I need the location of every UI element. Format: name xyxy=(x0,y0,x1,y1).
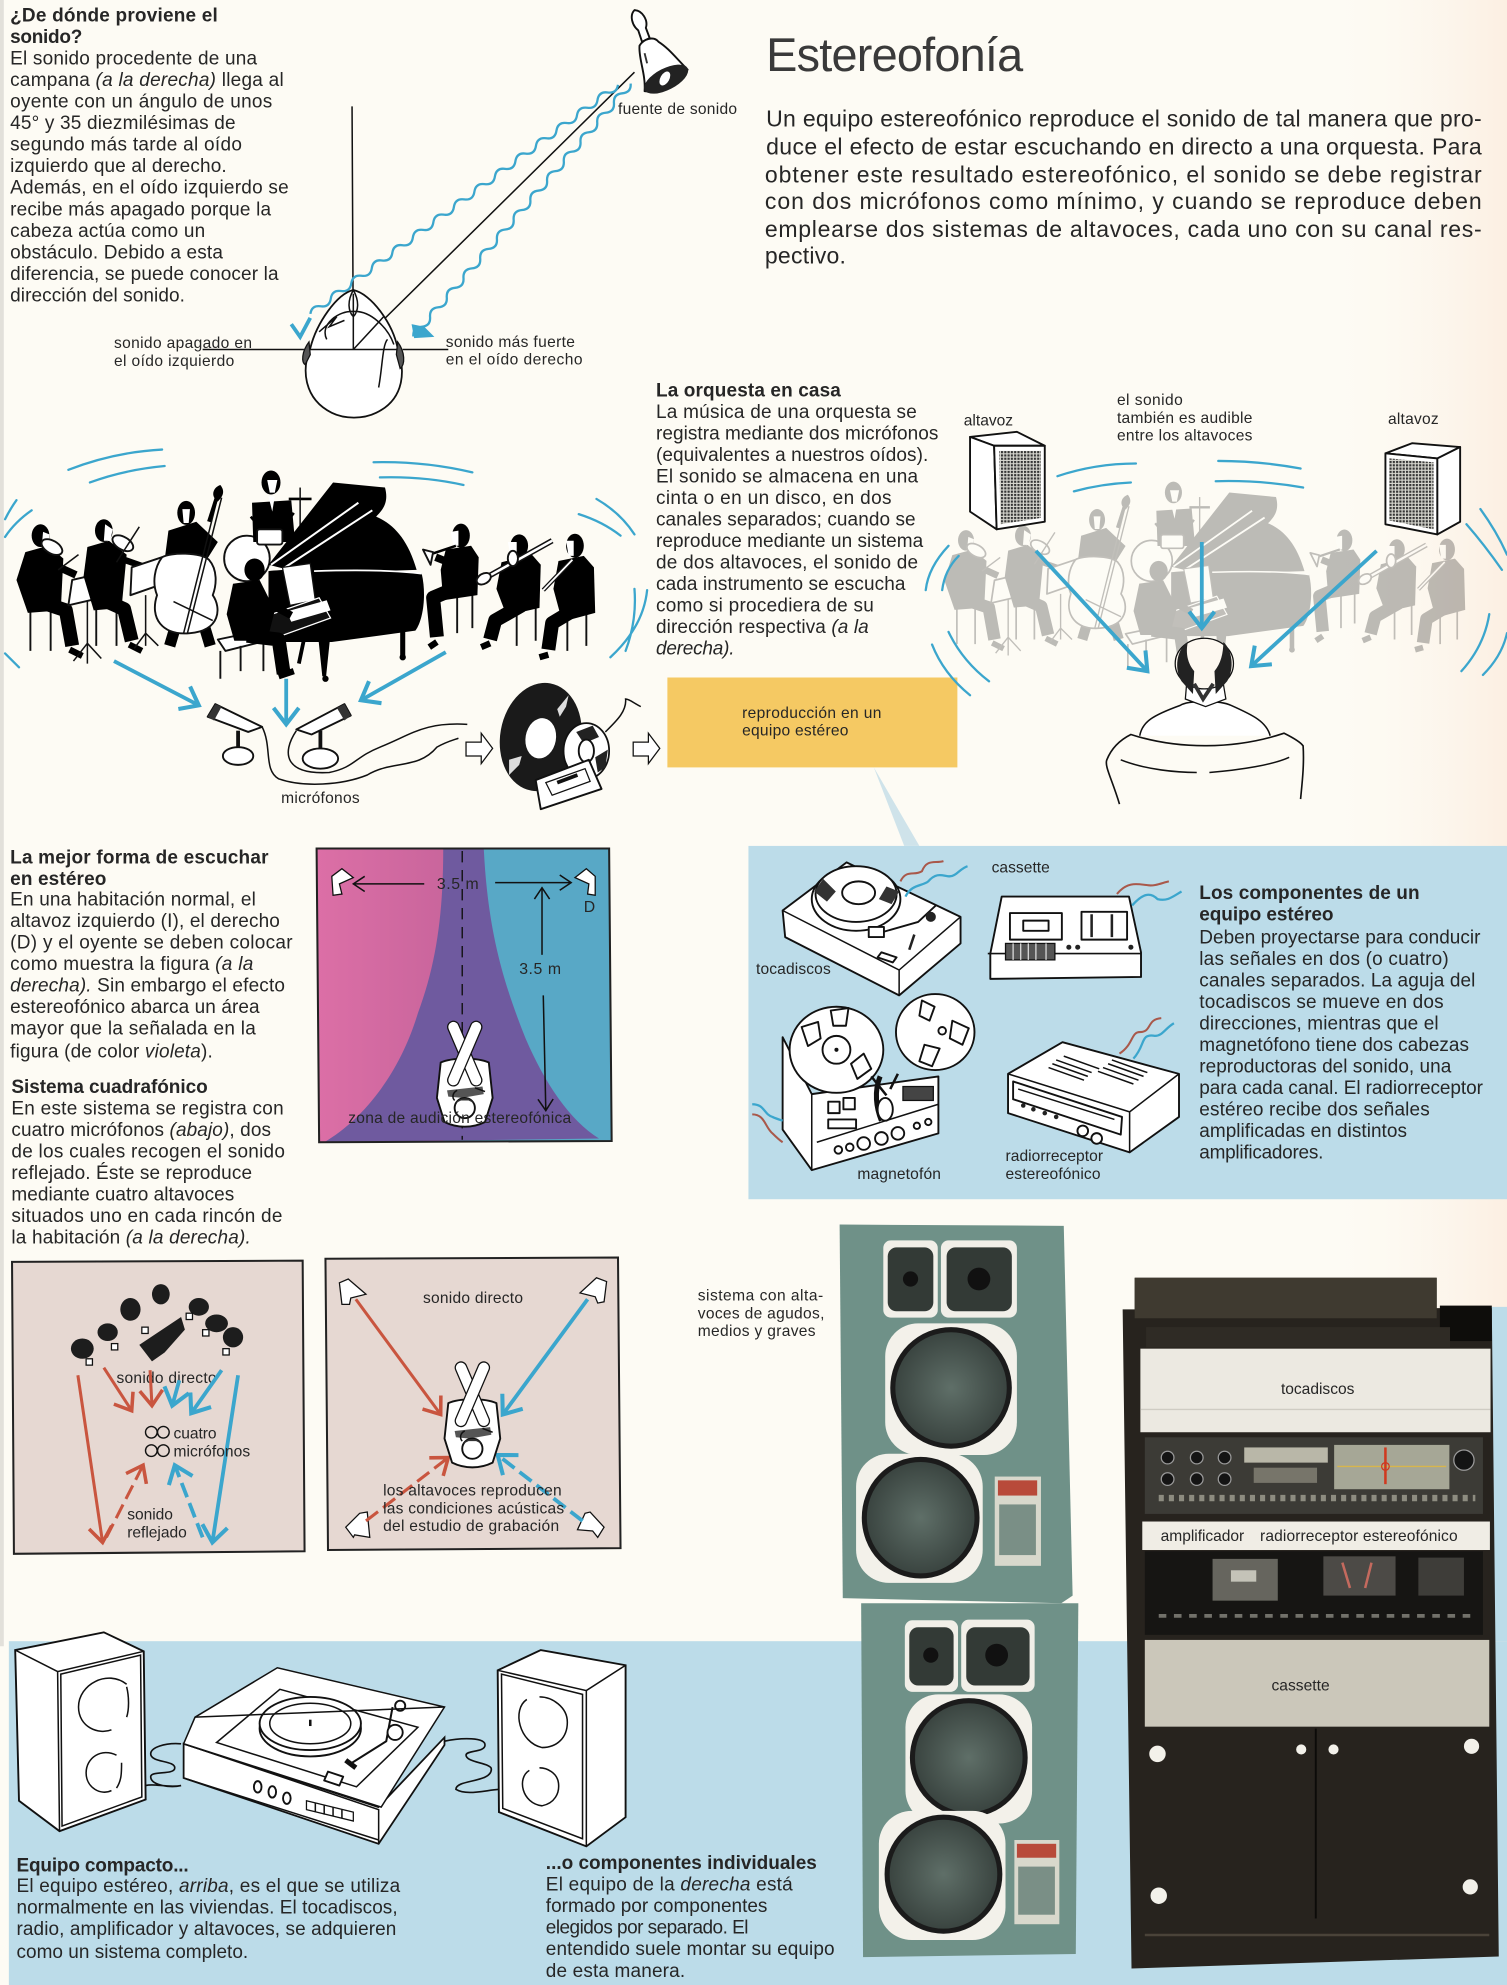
label: playback conditions: los altavoces reproducen xyxy=(383,1483,562,1500)
text: where sound comes from xyxy=(10,6,289,306)
red arrow 2 xyxy=(150,1370,152,1406)
label: zone: zona de audición estereofónica xyxy=(348,1110,571,1127)
label: speaker left: altavoz xyxy=(964,412,1013,429)
text: where sound comes from: campana (a la derecha) llega al xyxy=(10,70,284,91)
text: quadraphonic system: de los cuales recogen el sonido xyxy=(11,1141,285,1162)
text: best way to listen: como muestra la figura (a la xyxy=(10,954,253,975)
text: stereo components: Los componentes de un xyxy=(1199,883,1420,904)
arrow head: left ear xyxy=(291,318,310,337)
label: right ear: sonido más fuerte xyxy=(446,334,575,351)
text: orchestra at home: El sonido se almacena en una xyxy=(656,466,919,487)
left speaker xyxy=(332,869,353,895)
red arrow 1 xyxy=(104,1368,132,1411)
photo: lower speaker xyxy=(861,1603,1078,1957)
text: best way to listen: derecha). Sin embargo el efecto xyxy=(10,976,285,997)
text: where sound comes from: izquierdo que al derecho. xyxy=(10,156,227,177)
listener xyxy=(437,1027,493,1127)
arrow to right microphone xyxy=(361,652,446,700)
text: stereo components xyxy=(1199,883,1483,1164)
icon: right speaker xyxy=(1385,443,1460,534)
right microphone xyxy=(296,704,351,769)
turntable red wave xyxy=(900,861,943,881)
left cable xyxy=(146,1744,181,1786)
speaker top right xyxy=(580,1278,607,1303)
label: playback conditions: del estudio de grabación xyxy=(383,1518,559,1535)
icon: four microphones xyxy=(146,1426,169,1456)
arrow from right speaker xyxy=(1251,551,1377,666)
receiver xyxy=(1008,1042,1179,1152)
text: quadraphonic system: la habitación (a la derecha). xyxy=(11,1228,251,1249)
text: quadraphonic system: Sistema cuadrafónico xyxy=(11,1077,208,1098)
text: individual components: El equipo de la derecha está xyxy=(546,1875,793,1896)
cassette band: cassette xyxy=(1271,1678,1330,1695)
cabinet doors xyxy=(1145,1729,1489,1935)
intro paragraph: obtener este resultado estereofónico, el sonido se debe registrar xyxy=(765,161,1482,187)
text: compact system: normalmente en las viviendas. El tocadiscos, xyxy=(16,1897,398,1918)
label: left ear: sonido apagado en xyxy=(114,335,252,352)
text: stereo components: Deben proyectarse para conducir xyxy=(1199,927,1480,948)
cassette deck xyxy=(988,897,1141,979)
receiver signal waves xyxy=(1133,1023,1174,1059)
text: best way to listen: estereofónico abarca un área xyxy=(10,997,260,1018)
cassette deck unit xyxy=(1145,1551,1483,1635)
turntable xyxy=(783,862,961,995)
sound arcs xyxy=(926,461,1507,695)
text: best way to listen: mayor que la señalada en la xyxy=(10,1019,256,1040)
red direct arrow xyxy=(356,1299,441,1415)
text: orchestra at home: cada instrumento se escucha xyxy=(656,574,906,595)
text: individual components: de esta manera. xyxy=(546,1961,685,1982)
title: Estereofonía xyxy=(766,29,1024,81)
text: stereo components: reproductoras del sonido, una xyxy=(1199,1057,1452,1078)
label: receiver xyxy=(1006,1148,1103,1183)
blue arrow 1 xyxy=(172,1380,179,1406)
text: where sound comes from: El sonido procedente de una xyxy=(10,49,258,70)
horizontal distance: 3.5 m xyxy=(437,876,479,893)
right speaker xyxy=(575,869,595,895)
text: orchestra at home: de dos altavoces, el sonido de xyxy=(656,553,918,574)
icon: listener in chair xyxy=(1106,638,1303,804)
text: where sound comes from: sonido? xyxy=(10,27,82,48)
label: four microphones: cuatro xyxy=(173,1426,217,1443)
text: orchestra at home: canales separados; cuando se xyxy=(656,510,916,531)
receiver red wave xyxy=(1119,1018,1161,1054)
callout: stereo playback: equipo estéreo xyxy=(742,723,848,740)
cassette red wave xyxy=(1117,881,1169,894)
label: sound between speakers: también es audible xyxy=(1117,410,1252,427)
right cable xyxy=(445,1739,499,1792)
text: orchestra at home: reproduce mediante un sistema xyxy=(656,531,924,552)
panel: quad recording xyxy=(12,1261,305,1554)
label: four microphones: micrófonos xyxy=(173,1443,250,1460)
vertical distance: 3.5 m xyxy=(519,961,561,978)
text: orchestra at home xyxy=(656,380,938,660)
text: stereo components: direcciones, mientras que el xyxy=(1199,1014,1439,1035)
text: compact system: El equipo estéreo, arriba, es el que se utiliza xyxy=(16,1876,401,1897)
text: compact system: como un sistema completo. xyxy=(16,1942,248,1963)
wave: to left ear xyxy=(310,85,618,314)
connector to components panel xyxy=(874,767,919,846)
text: orchestra at home: dirección respectiva (a la xyxy=(656,617,869,638)
panel: compact system background xyxy=(9,1307,1507,1985)
chart: stereo listening zone xyxy=(317,848,612,1142)
label: recorder: magnetofón xyxy=(857,1166,941,1183)
text: stereo components: para cada canal. El radiorreceptor xyxy=(1199,1078,1483,1099)
label: speaker right: altavoz xyxy=(1388,411,1439,428)
photo: upper speaker xyxy=(840,1225,1073,1603)
label: left ear xyxy=(114,335,252,370)
text: best way to listen xyxy=(10,848,293,1062)
diagram: sound reaching the ears xyxy=(114,10,737,418)
blue reflected arrow xyxy=(498,1455,583,1521)
text: stereo components: magnetófono tiene dos cabezas xyxy=(1199,1035,1469,1056)
hollow arrow 2 xyxy=(633,733,660,764)
amplifier label band xyxy=(1142,1522,1490,1550)
label: sound between speakers: el sonido xyxy=(1117,392,1183,409)
arrow to centre xyxy=(285,679,288,724)
label: right ear: en el oído derecho xyxy=(446,352,583,369)
text: individual components xyxy=(546,1853,835,1982)
arrow from left speaker xyxy=(1036,551,1147,671)
blue arrow 2 xyxy=(191,1370,222,1413)
diagram: stereo listening xyxy=(926,392,1507,804)
recorder red wave xyxy=(752,1114,783,1142)
text: best way to listen: figura (de color violeta). xyxy=(10,1041,213,1062)
label: playback conditions: las condiciones acústicas xyxy=(383,1500,564,1517)
red reflected arrow xyxy=(366,1458,448,1521)
text: where sound comes from: diferencia, se puede conocer la xyxy=(10,264,279,285)
text: stereo components: amplificadores. xyxy=(1199,1143,1323,1164)
intro paragraph: Un equipo estereofónico reproduce el sonido de tal manera que pro- xyxy=(766,106,1482,132)
turntable signal waves xyxy=(905,866,968,897)
label: sound between speakers xyxy=(1117,392,1253,445)
text: orchestra at home: La música de una orquesta se xyxy=(656,402,917,423)
text: where sound comes from: segundo más tarde al oído xyxy=(10,135,242,156)
ghosted orchestra xyxy=(944,482,1465,672)
callout: stereo playback xyxy=(667,677,957,767)
text: individual components: ...o componentes individuales xyxy=(546,1853,817,1874)
wave: to right ear xyxy=(413,84,631,336)
text: where sound comes from: recibe más apagado porque la xyxy=(10,199,271,220)
arrow to left microphone xyxy=(114,661,199,705)
text: individual components: formado por componentes xyxy=(546,1896,767,1917)
label: speaker system xyxy=(698,1288,824,1340)
text: orchestra at home: registra mediante dos micrófonos xyxy=(656,423,938,444)
text: orchestra at home: La orquesta en casa xyxy=(656,380,841,401)
text: where sound comes from: cabeza actúa como un xyxy=(10,221,205,242)
text: individual components: entendido suele montar su equipo xyxy=(546,1939,835,1960)
icon: tape reel xyxy=(564,699,641,779)
icon: vinyl disc xyxy=(491,676,590,798)
cassette signal waves xyxy=(1132,892,1182,905)
label: cassette: cassette xyxy=(992,860,1050,877)
intro paragraph: pectivo. xyxy=(765,242,846,268)
text: stereo components: tocadiscos se mueve en dos xyxy=(1199,992,1444,1013)
arrow head: right ear xyxy=(412,324,434,338)
panel: quad playback xyxy=(325,1257,621,1550)
label: direct sound: sonido directo xyxy=(117,1370,217,1387)
text: compact system: Equipo compacto... xyxy=(16,1856,189,1877)
label: speaker system: voces de agudos, xyxy=(698,1305,824,1322)
text: quadraphonic system: cuatro micrófonos (abajo), dos xyxy=(11,1120,271,1141)
reflected red arrow xyxy=(106,1465,143,1537)
reel tape recorder xyxy=(783,994,974,1170)
blue long arrow xyxy=(212,1375,238,1542)
turntable xyxy=(184,1668,445,1844)
label: four microphones xyxy=(173,1426,250,1460)
text: stereo components: equipo estéreo xyxy=(1199,905,1334,926)
intro paragraph: con dos micrófonos como mínimo, y cuando se reproduce deben xyxy=(765,188,1482,214)
label: receiver: estereofónico xyxy=(1006,1166,1100,1183)
right speaker xyxy=(498,1650,626,1846)
text: compact system: radio, amplificador y altavoces, se adquieren xyxy=(16,1919,396,1940)
label: sound between speakers: entre los altavoces xyxy=(1117,428,1253,445)
text: best way to listen: En una habitación normal, el xyxy=(10,889,256,910)
text: where sound comes from: ¿De dónde proviene el xyxy=(10,6,218,27)
speaker top left xyxy=(339,1279,366,1304)
text: best way to listen: La mejor forma de escuchar xyxy=(10,848,269,869)
label: speaker system: medios y graves xyxy=(698,1323,816,1340)
intro paragraph: emplearse dos sistemas de altavoces, cada uno con su canal res- xyxy=(765,216,1482,242)
speaker bottom right xyxy=(577,1512,604,1537)
icon: left speaker xyxy=(970,432,1045,529)
text: orchestra at home: (equivalentes a nuestros oídos). xyxy=(656,445,928,466)
panel: stereo components xyxy=(748,846,1507,1199)
cassette band xyxy=(1145,1640,1489,1727)
text: best way to listen: altavoz izquierdo (I), el derecho xyxy=(10,911,280,932)
label: reflected sound xyxy=(127,1507,187,1541)
text: where sound comes from: dirección del sonido. xyxy=(10,285,185,306)
turntable band: tocadiscos xyxy=(1281,1381,1355,1398)
text: quadraphonic system: reflejado. Éste se reproduce xyxy=(11,1163,252,1184)
violet zone xyxy=(324,848,599,1142)
text: stereo components: las señales en dos (o cuatro) xyxy=(1199,949,1449,970)
label: speaker system: sistema con alta- xyxy=(698,1288,823,1305)
text: quadraphonic system: mediante cuatro altavoces xyxy=(11,1184,234,1205)
listener xyxy=(445,1368,500,1467)
icon: bell xyxy=(632,10,692,100)
text: quadraphonic system: En este sistema se registra con xyxy=(11,1098,284,1119)
sound arcs xyxy=(5,450,647,667)
label: microphones: micrófonos xyxy=(281,790,360,807)
reference lines xyxy=(203,72,634,350)
turntable band xyxy=(1140,1349,1491,1432)
amplifier label band: amplificador xyxy=(1161,1528,1244,1545)
label: D: D xyxy=(584,899,595,916)
recorder signal waves xyxy=(752,1104,783,1121)
photo: component rack xyxy=(1123,1278,1499,1969)
label: sound source: fuente de sonido xyxy=(618,101,737,118)
text: where sound comes from: 45° y 35 diezmilésimas de xyxy=(10,113,236,134)
label: turntable: tocadiscos xyxy=(756,961,831,978)
text: orchestra at home: cinta o en un disco, en dos xyxy=(656,488,892,509)
label: playback conditions xyxy=(383,1483,564,1535)
label: reflected sound: sonido xyxy=(127,1507,173,1524)
text: where sound comes from: oyente con un ángulo de unos xyxy=(10,92,272,113)
arrow from centre xyxy=(1200,542,1203,628)
text: individual components: elegidos por separado. El xyxy=(546,1918,748,1939)
text: stereo components: amplificadas en distintos xyxy=(1199,1121,1407,1142)
hollow arrow 1 xyxy=(466,733,493,764)
text: quadraphonic system xyxy=(11,1077,285,1249)
left microphone xyxy=(208,704,262,765)
speaker bottom left xyxy=(346,1512,370,1537)
text: stereo components: estéreo recibe dos señales xyxy=(1199,1100,1430,1121)
red long arrow xyxy=(78,1375,103,1542)
orchestra illustration xyxy=(16,470,595,682)
icon: head from above xyxy=(303,290,404,418)
text: quadraphonic system: situados uno en cada rincón de xyxy=(11,1206,282,1227)
label: reflected sound: reflejado xyxy=(127,1524,187,1541)
icon: cassette xyxy=(536,760,602,809)
text: orchestra at home: derecha). xyxy=(656,639,735,660)
left speaker xyxy=(15,1632,146,1831)
diagram: orchestra recording xyxy=(5,450,660,809)
label: receiver: radiorreceptor xyxy=(1006,1148,1103,1165)
receiver unit xyxy=(1145,1437,1483,1514)
amplifier label band: radiorreceptor estereofónico xyxy=(1260,1528,1458,1545)
text: stereo components: canales separados. La aguja del xyxy=(1199,970,1475,991)
intro paragraph xyxy=(765,106,1482,268)
label: right ear xyxy=(446,334,583,369)
reflected blue arrow xyxy=(175,1465,203,1537)
text: best way to listen: (D) y el oyente se deben colocar xyxy=(10,932,293,953)
text: compact system xyxy=(16,1856,401,1963)
illustration: compact system xyxy=(15,1632,626,1846)
intro paragraph: duce el efecto de estar escuchando en directo a una orquesta. Para xyxy=(766,133,1482,159)
text: best way to listen: en estéreo xyxy=(10,869,106,890)
label: left ear: el oído izquierdo xyxy=(114,353,234,370)
label: direct sound: sonido directo xyxy=(423,1290,523,1307)
text: where sound comes from: Además, en el oído izquierdo se xyxy=(10,178,289,199)
microphone cables xyxy=(262,724,467,784)
orchestra plan xyxy=(71,1284,243,1365)
callout: stereo playback: reproducción en un xyxy=(742,705,881,722)
blue direct arrow xyxy=(503,1299,588,1415)
text: where sound comes from: obstáculo. Debido a esta xyxy=(10,242,223,263)
text: orchestra at home: como si procediera de su xyxy=(656,596,874,617)
